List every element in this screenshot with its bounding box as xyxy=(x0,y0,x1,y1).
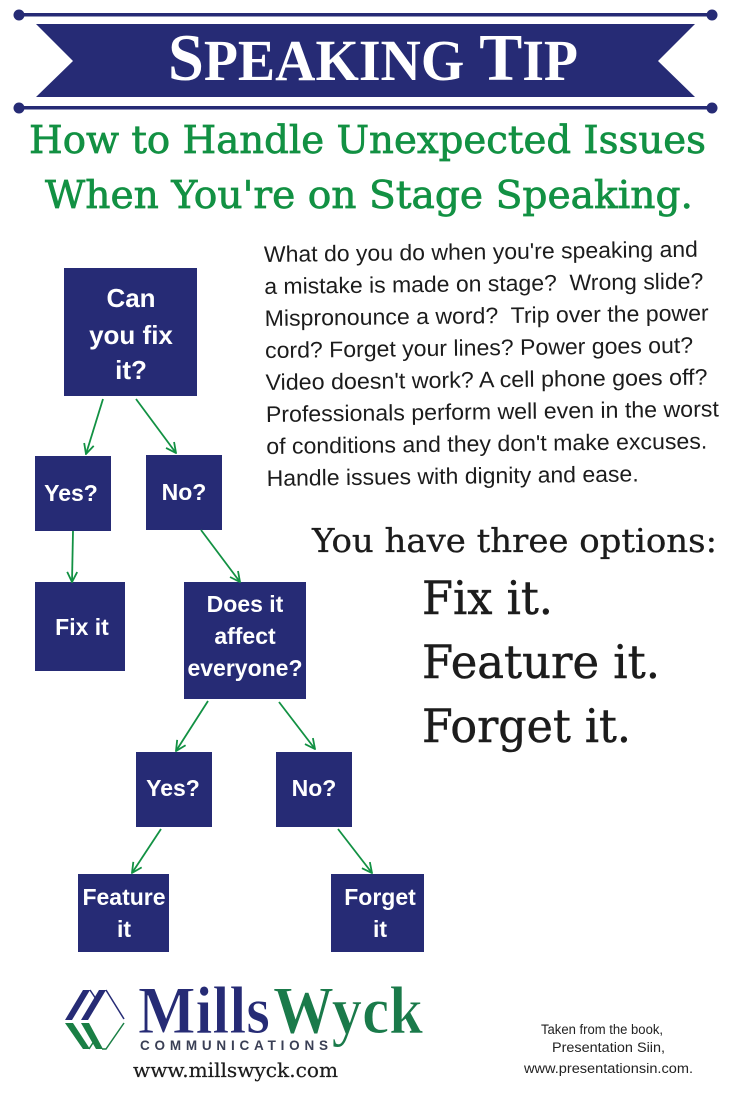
logo: MillsWyck xyxy=(65,972,423,1082)
box: forget it: it xyxy=(373,916,387,942)
arrow: does to yes xyxy=(176,701,208,751)
box: does it affect everyone: everyone? xyxy=(187,655,303,681)
intro paragraph: Handle issues with dignity and ease. xyxy=(266,461,639,491)
green headline: When You're on Stage Speaking. xyxy=(45,173,693,217)
box: does it affect everyone: Does it xyxy=(207,591,284,617)
banner ribbon xyxy=(36,21,695,97)
logo wordmark: Wyck xyxy=(273,972,423,1048)
box: no second xyxy=(276,752,352,827)
logo mark xyxy=(65,990,124,1049)
three options list: Fix it. xyxy=(422,571,553,625)
arrow: yes to feature xyxy=(132,829,161,873)
arrow: no to forget xyxy=(338,829,372,873)
box: feature it: it xyxy=(117,916,131,942)
arrow: yes to fix xyxy=(72,531,73,582)
intro paragraph: Mispronounce a word? Trip over the power xyxy=(265,301,709,331)
logo subtitle: COMMUNICATIONS xyxy=(140,1038,328,1053)
three options list xyxy=(422,571,660,753)
banner title: SPEAKING TIP xyxy=(168,21,578,95)
logo wordmark xyxy=(138,972,423,1048)
box: can you fix it xyxy=(64,268,197,396)
intro paragraph: cord? Forget your lines? Power goes out? xyxy=(265,333,693,363)
box: yes second: Yes? xyxy=(146,775,200,801)
box: fix it: Fix it xyxy=(55,614,109,640)
intro paragraph: Video doesn't work? A cell phone goes off? xyxy=(265,365,708,395)
intro paragraph: What do you do when you're speaking and xyxy=(264,237,698,267)
intro paragraph: a mistake is made on stage? Wrong slide? xyxy=(264,269,703,299)
box: can you fix it: you fix xyxy=(89,320,173,350)
logo url: www.millswyck.com xyxy=(133,1059,338,1082)
box: yes second xyxy=(136,752,212,827)
arrow: does to no xyxy=(279,702,315,749)
book credit: www.presentationsin.com. xyxy=(523,1061,693,1076)
intro paragraph: Professionals perform well even in the worst xyxy=(266,396,720,427)
logo wordmark: Mills xyxy=(138,972,270,1048)
box: can you fix it: Can xyxy=(106,283,156,313)
box: feature it: Feature xyxy=(82,884,166,910)
box: fix it xyxy=(35,582,125,671)
box: does it affect everyone: affect xyxy=(214,623,276,649)
green headline xyxy=(29,118,706,217)
box: can you fix it: it? xyxy=(115,355,147,385)
three options list: Feature it. xyxy=(422,635,660,689)
flowchart xyxy=(35,268,424,952)
green headline: How to Handle Unexpected Issues xyxy=(29,118,706,162)
arrow: no to does xyxy=(201,530,240,582)
box: forget it xyxy=(331,874,424,952)
box: feature it xyxy=(78,874,169,952)
book credit: Presentation Siin, xyxy=(552,1040,665,1055)
box: yes xyxy=(35,456,111,531)
box: yes: Yes? xyxy=(44,480,98,506)
box: no xyxy=(146,455,222,530)
intro paragraph: of conditions and they don't make excuses. xyxy=(266,429,707,459)
arrow: can to yes xyxy=(86,399,103,454)
three options heading: You have three options: xyxy=(311,521,717,560)
book credit: Taken from the book, xyxy=(541,1022,663,1037)
arrow: can to no xyxy=(136,399,176,453)
box: does it affect everyone xyxy=(184,582,306,699)
box: no: No? xyxy=(162,479,206,505)
box: forget it: Forget xyxy=(344,884,416,910)
three options list: Forget it. xyxy=(422,699,631,753)
bottom rule xyxy=(14,102,718,114)
top rule xyxy=(14,10,718,20)
box: no second: No? xyxy=(292,775,336,801)
book credit xyxy=(523,1022,693,1076)
intro paragraph xyxy=(264,236,721,491)
